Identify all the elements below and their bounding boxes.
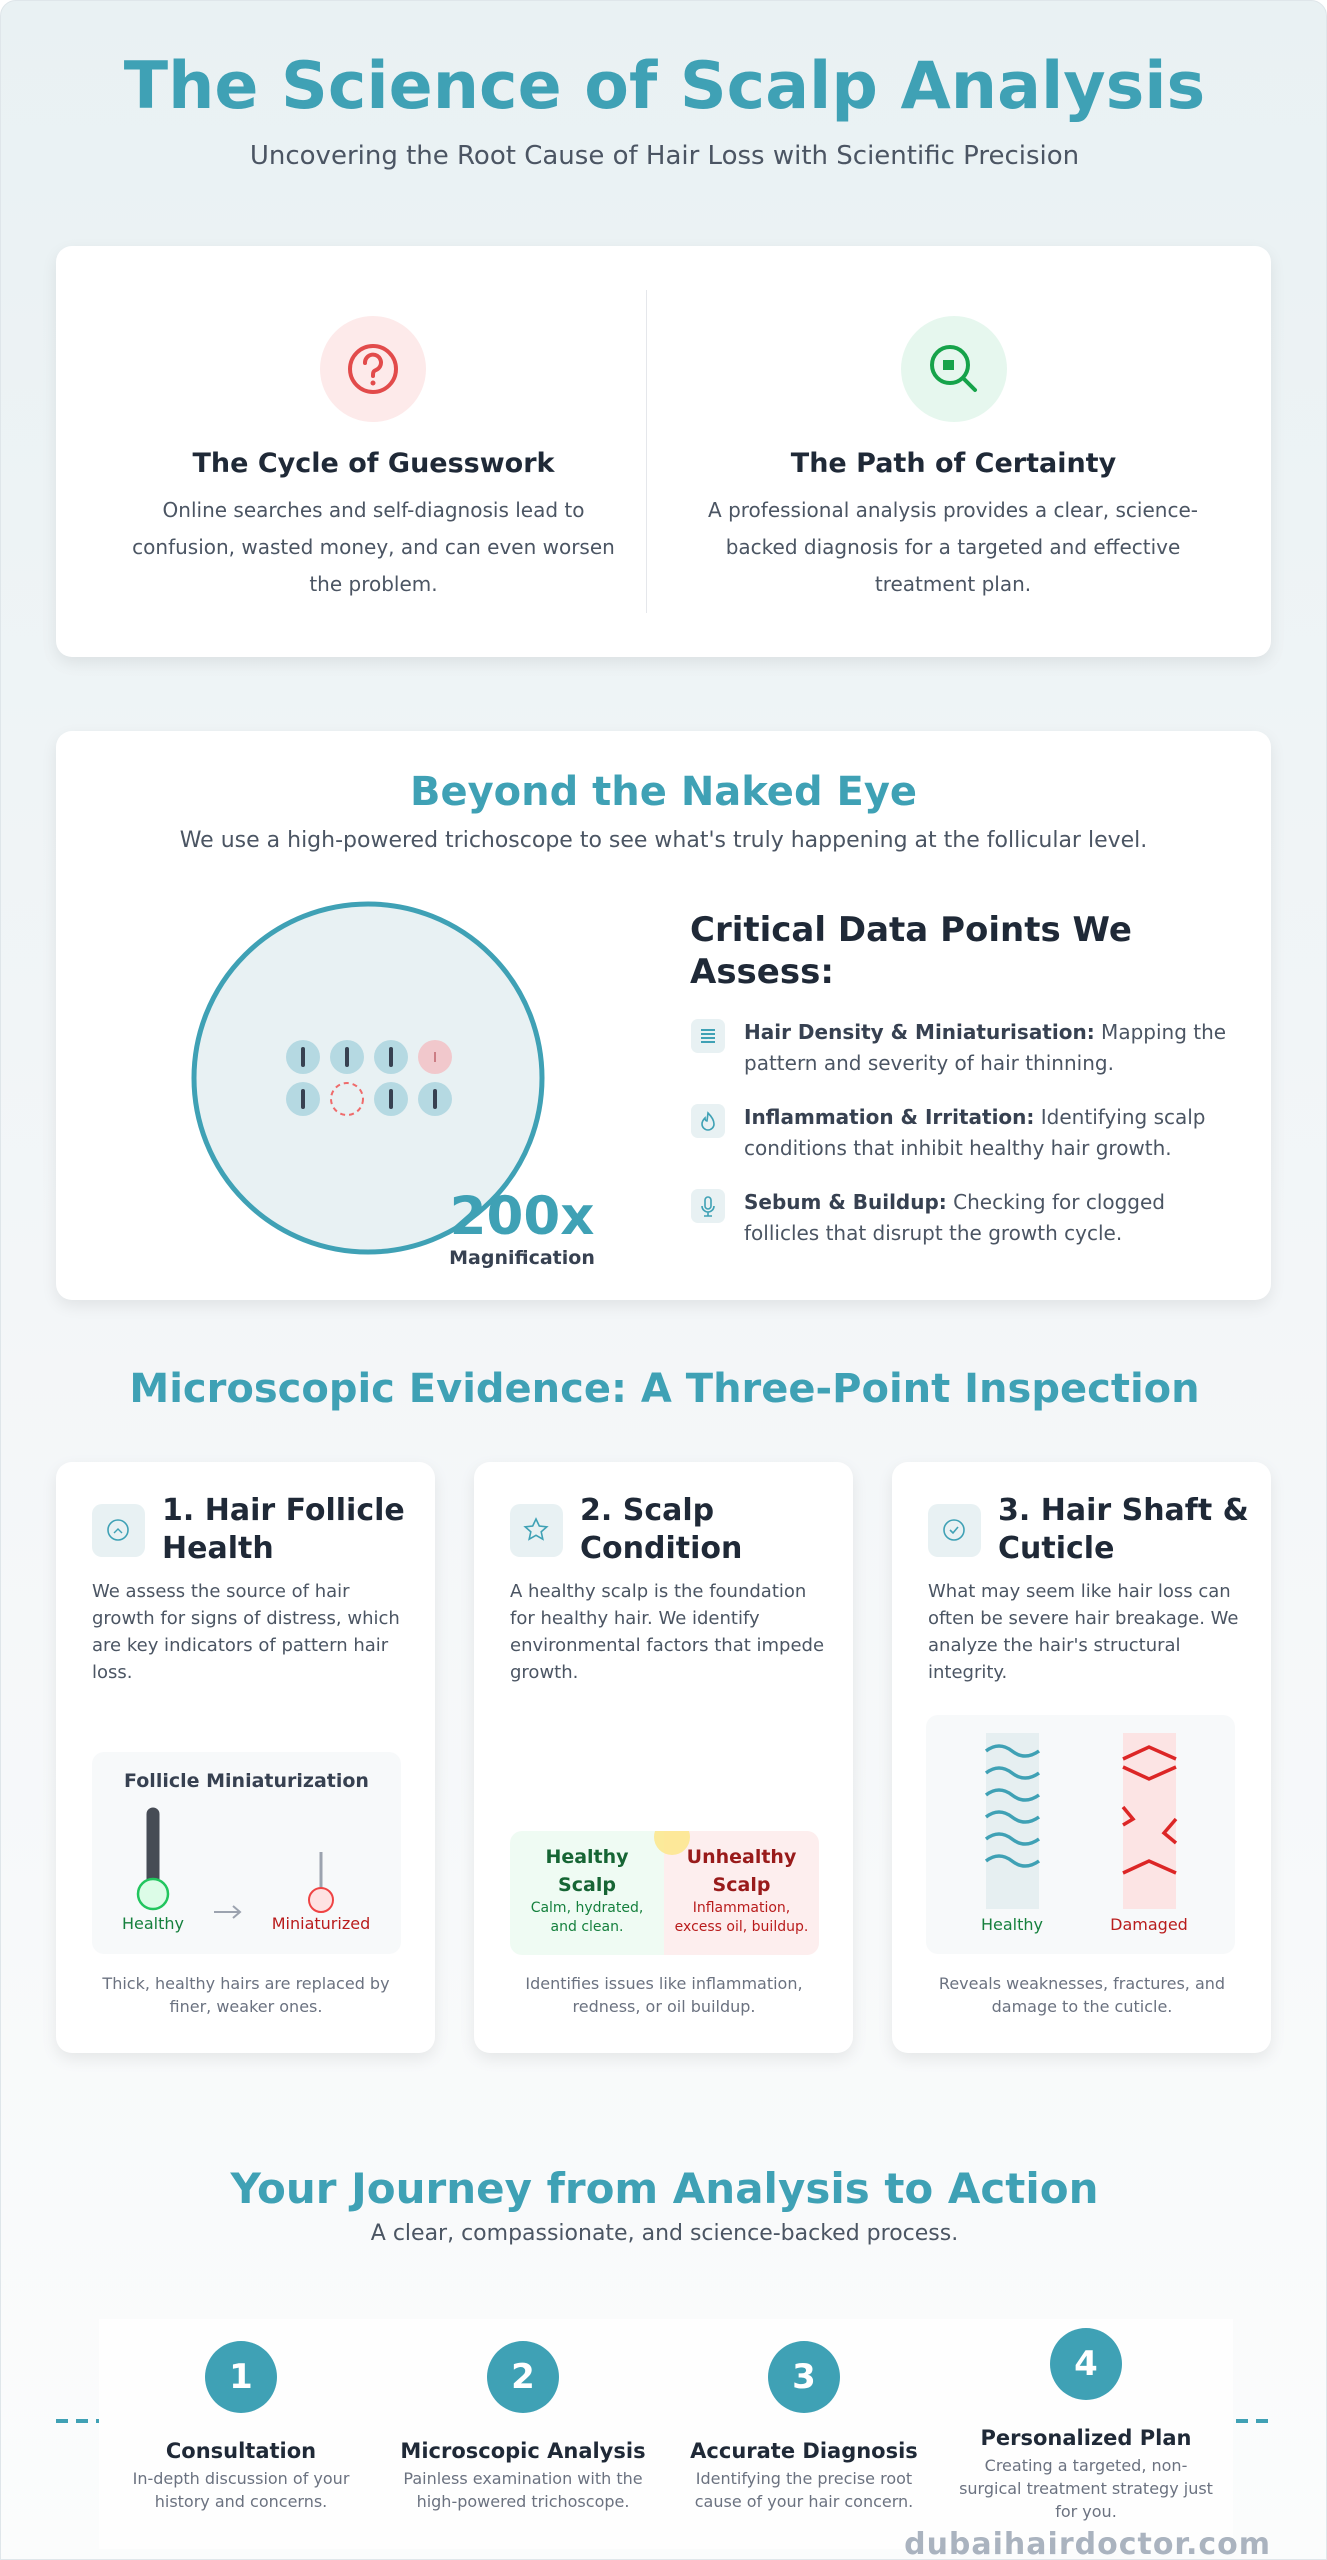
- text: A healthy scalp is the foundation for healthy hair. We identify environmental factors that impede growth.: [510, 1581, 824, 1683]
- heading: 2. Scalp Condition: [580, 1493, 742, 1566]
- step 4: Creating a targeted, non-: [985, 2456, 1187, 2475]
- icon: magnifier: [901, 316, 1007, 422]
- step 1: Consultation: [166, 2439, 316, 2463]
- step 3: Identifying the precise root: [696, 2469, 912, 2488]
- step 1: [133, 2341, 350, 2511]
- step 4: 4: [1074, 2344, 1098, 2384]
- heading: Beyond the Naked Eye: [410, 769, 917, 815]
- step 2: Microscopic Analysis: [400, 2439, 646, 2463]
- chart: healthy vs unhealthy scalp: Unhealthy: [687, 1846, 796, 1868]
- chart: healthy vs unhealthy scalp: Inflammation,: [693, 1900, 790, 1916]
- dashed connector: [56, 2419, 1271, 2423]
- chart: healthy vs unhealthy scalp: Healthy: [545, 1846, 629, 1868]
- step 3: [690, 2341, 918, 2511]
- step 1: In-depth discussion of your: [133, 2469, 349, 2488]
- chart: healthy vs unhealthy scalp: and clean.: [551, 1919, 623, 1935]
- step 3: Accurate Diagnosis: [690, 2439, 918, 2463]
- chart: follicle miniaturization: Follicle Miniaturization: [124, 1770, 369, 1792]
- step 2: high-powered trichoscope.: [417, 2492, 629, 2511]
- caption: Reveals weaknesses, fractures, and damage to the cuticle.: [939, 1974, 1225, 2016]
- panel: guesswork vs certainty: [56, 246, 1271, 657]
- heading: 3. Hair Shaft & Cuticle: [998, 1493, 1249, 1566]
- step 2: Painless examination with the: [403, 2469, 643, 2488]
- stat: 200x: Magnification: [449, 1247, 595, 1269]
- caption: Thick, healthy hairs are replaced by finer, weaker ones.: [102, 1974, 390, 2016]
- panel: scalp condition: [474, 1462, 853, 2053]
- text: certainty: A professional analysis provides a clear, science-backed diagnosis for a targeted and effective treatment plan.: [708, 498, 1198, 596]
- icon: [928, 1504, 981, 1557]
- subtitle: Uncovering the Root Cause of Hair Loss with Scientific Precision: [250, 141, 1079, 171]
- heading: three-point inspection: Microscopic Evidence: A Three-Point Inspection: [129, 1366, 1200, 1412]
- chart: healthy vs unhealthy scalp: excess oil, buildup.: [675, 1919, 808, 1935]
- text: guesswork: Online searches and self-diagnosis lead to confusion, wasted money, and can even worsen the problem.: [132, 498, 615, 596]
- heading: journey: Your Journey from Analysis to Action: [230, 2164, 1099, 2213]
- text: What may seem like hair loss can often be severe hair breakage. We analyze the hair's structural integrity.: [928, 1581, 1238, 1683]
- subtitle: We use a high-powered trichoscope to see what's truly happening at the follicular level.: [180, 828, 1147, 853]
- icon: [92, 1504, 145, 1557]
- step 1: history and concerns.: [155, 2492, 327, 2511]
- item: density: Hair Density & Miniaturisation: Mapping the pattern and severity of hair thinning.: [744, 1020, 1226, 1075]
- chart: healthy vs damaged shaft: Healthy: [981, 1915, 1043, 1934]
- title: The Science of Scalp Analysis: [124, 49, 1205, 124]
- chart: trichoscope view: [192, 902, 544, 1254]
- step 4: surgical treatment strategy just: [959, 2479, 1213, 2498]
- chart: healthy vs unhealthy scalp: Scalp: [713, 1874, 770, 1896]
- chart: follicle miniaturization: Healthy: [122, 1914, 184, 1933]
- step 4: [959, 2328, 1213, 2521]
- heading: 1. Hair Follicle Health: [162, 1493, 405, 1566]
- chart: healthy vs damaged shaft: [926, 1715, 1235, 1954]
- chart: healthy vs unhealthy scalp: Scalp: [558, 1874, 616, 1896]
- stat: 200x: 200x: [450, 1186, 594, 1247]
- chart: follicle miniaturization: Miniaturized: [272, 1914, 370, 1933]
- text: We assess the source of hair growth for signs of distress, which are key indicators of pattern hair loss.: [92, 1581, 400, 1683]
- subtitle: journey: A clear, compassionate, and science-backed process.: [371, 2221, 958, 2246]
- icon: [510, 1504, 563, 1557]
- item: inflammation: Inflammation & Irritation: Identifying scalp conditions that inhibit healthy hair growth.: [744, 1105, 1206, 1160]
- caption: Identifies issues like inflammation, redness, or oil buildup.: [525, 1974, 803, 2016]
- panel: follicle health: [56, 1462, 435, 2053]
- heading: certainty: The Path of Certainty: [791, 448, 1116, 479]
- panel: beyond the naked eye: [56, 731, 1271, 1300]
- step 3: cause of your hair concern.: [695, 2492, 913, 2511]
- chart: healthy vs damaged shaft: Damaged: [1110, 1915, 1188, 1934]
- icon: question: [320, 316, 426, 422]
- panel: hair shaft: [892, 1462, 1271, 2053]
- chart: healthy vs unhealthy scalp: [510, 1831, 819, 1955]
- step 1: 1: [229, 2357, 253, 2397]
- step 2: 2: [511, 2357, 535, 2397]
- step 4: Personalized Plan: [981, 2426, 1191, 2450]
- step 2: [400, 2341, 646, 2511]
- chart: follicle miniaturization: [92, 1752, 401, 1954]
- step 3: 3: [792, 2357, 816, 2397]
- heading: critical data points: Critical Data Points We Assess:: [690, 910, 1132, 992]
- chart: healthy vs unhealthy scalp: Calm, hydrated,: [531, 1900, 643, 1916]
- panel: steps: [99, 2319, 1233, 2549]
- item: sebum: Sebum & Buildup: Checking for clogged follicles that disrupt the growth cycle.: [744, 1190, 1165, 1245]
- heading: guesswork: The Cycle of Guesswork: [192, 448, 555, 479]
- step 4: for you.: [1055, 2502, 1117, 2521]
